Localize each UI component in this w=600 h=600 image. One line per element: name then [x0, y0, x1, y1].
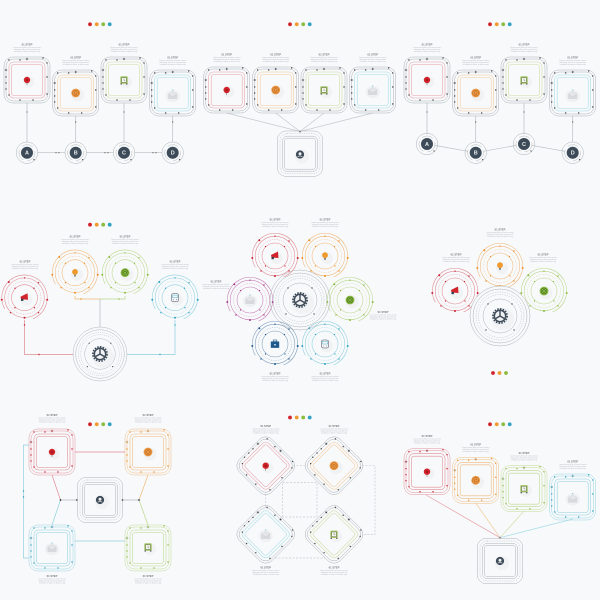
icons — [20, 268, 183, 306]
lettered circles: C — [122, 151, 126, 157]
panel: squares with staggered lettered circles — [404, 22, 596, 163]
icons — [424, 76, 580, 102]
lettered circles: A — [25, 151, 29, 157]
panel: descending squares into hub — [404, 422, 596, 584]
lettered circles — [16, 142, 183, 163]
captions — [38, 413, 162, 584]
icons — [24, 76, 180, 102]
captions — [11, 234, 189, 270]
captions — [213, 52, 387, 63]
captions — [413, 434, 587, 470]
central square — [277, 130, 323, 176]
dashed connectors — [266, 466, 375, 558]
step squares — [404, 449, 596, 520]
lettered circles: D — [171, 151, 175, 157]
palette dots — [488, 22, 512, 26]
step squares — [404, 57, 596, 116]
panel: three circles over gear — [424, 228, 575, 375]
connector lines — [426, 495, 573, 538]
central square — [77, 477, 123, 523]
step squares — [204, 67, 396, 113]
lettered circles: B — [474, 151, 478, 157]
captions — [442, 228, 557, 263]
connector lines — [26, 103, 173, 153]
step circles — [0, 242, 206, 329]
panel: four circles into gear — [0, 223, 206, 381]
step diamonds — [233, 433, 367, 567]
step squares — [4, 57, 196, 116]
panel: four squares into one hub — [204, 22, 396, 176]
lettered circles — [416, 133, 583, 163]
lettered circles: D — [571, 151, 575, 157]
palette dots — [288, 22, 312, 26]
palette dots — [88, 422, 112, 426]
panel: squares with lettered circles — [4, 22, 196, 163]
icons — [259, 461, 342, 542]
palette dots — [88, 223, 112, 227]
icons — [451, 262, 552, 300]
icons — [424, 468, 580, 506]
central gear — [470, 286, 530, 346]
step circles — [219, 225, 381, 375]
captions — [13, 42, 187, 66]
palette dots — [491, 371, 508, 375]
connector lines — [24, 296, 176, 355]
palette dots — [88, 22, 112, 26]
connector lines — [227, 113, 373, 132]
palette dots — [288, 416, 312, 419]
connector lines — [426, 103, 573, 153]
central gear — [73, 327, 127, 381]
central gear — [270, 270, 330, 330]
central square — [477, 537, 523, 584]
lettered circles: C — [522, 142, 526, 148]
captions — [202, 218, 397, 382]
icons — [243, 252, 358, 352]
panel: diamonds — [233, 416, 375, 576]
captions — [413, 42, 587, 66]
connector lines — [23, 445, 148, 558]
palette dots — [488, 422, 512, 426]
step circles — [424, 235, 575, 322]
panel: corner squares with centre square — [23, 413, 171, 584]
icons — [223, 85, 380, 98]
icons — [45, 448, 156, 555]
lettered circles: B — [74, 151, 78, 157]
step squares — [29, 429, 171, 571]
lettered circles: A — [425, 142, 429, 148]
panel: six circles around gear — [202, 218, 397, 382]
captions — [252, 424, 348, 576]
